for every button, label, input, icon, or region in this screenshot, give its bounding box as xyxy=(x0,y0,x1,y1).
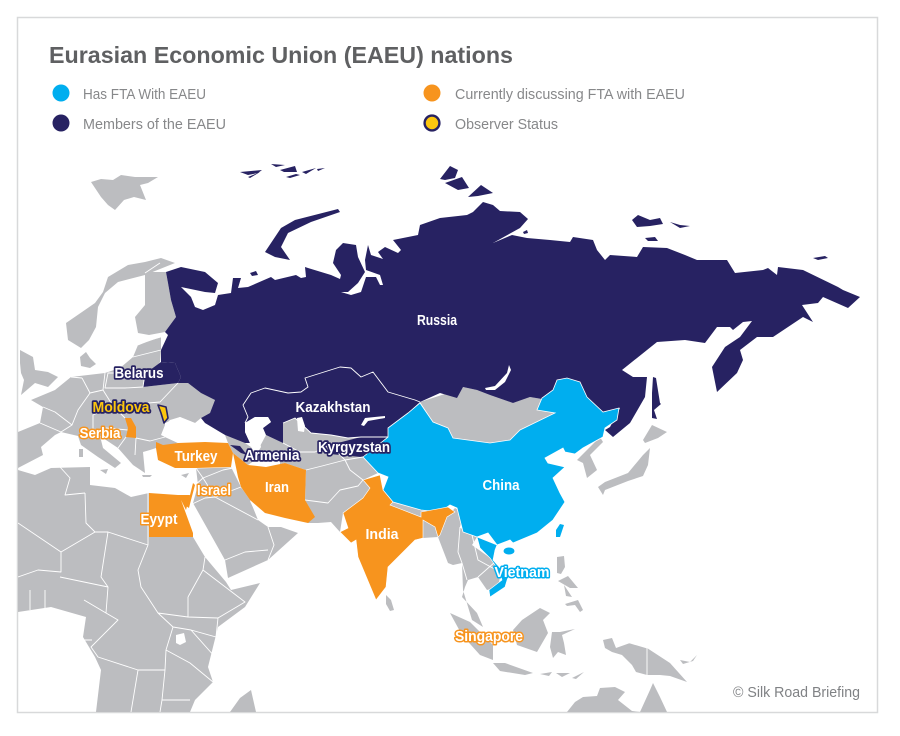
Svalbard xyxy=(91,175,158,210)
Caucasus xyxy=(225,435,254,465)
Lake Victoria xyxy=(176,633,186,645)
label: Israel: Israel xyxy=(197,483,231,499)
Japan xyxy=(598,425,667,495)
Belarus xyxy=(143,362,181,387)
Central and South Asia xyxy=(258,418,378,532)
Serbia xyxy=(125,418,136,438)
Sumatra xyxy=(450,613,493,660)
label: Armenia: Armenia xyxy=(244,448,300,464)
Red Sea xyxy=(181,502,227,580)
Franz Josef Land xyxy=(240,164,325,178)
label: Russia: Russia xyxy=(417,313,458,329)
Madagascar xyxy=(230,690,256,712)
Java and lesser islands xyxy=(493,663,584,679)
Novaya Zemlya xyxy=(265,209,340,260)
Borneo xyxy=(513,608,550,652)
Severnaya Zemlya xyxy=(440,166,493,197)
Black Sea xyxy=(165,417,228,443)
Vietnam xyxy=(477,537,508,597)
Sri Lanka xyxy=(386,595,394,611)
legend item: members: Members of the EAEU xyxy=(83,117,226,133)
country labels xyxy=(80,313,550,645)
label: Kazakhstan: Kazakhstan xyxy=(296,400,370,416)
Kazakhstan to China and Central Asia border xyxy=(283,418,388,438)
continental Europe xyxy=(18,337,215,473)
Mediterranean islands xyxy=(79,449,189,478)
Turkey surrounds, Caucasus and Middle East xyxy=(193,467,298,578)
Scandinavia xyxy=(66,258,175,348)
Central Asia borders xyxy=(283,443,363,503)
India xyxy=(340,475,455,600)
Middle East borders xyxy=(190,467,274,560)
legend xyxy=(52,84,685,133)
Kyrgyzstan xyxy=(330,437,388,457)
Caspian Sea xyxy=(245,417,280,469)
label: Serbia: Serbia xyxy=(80,426,121,442)
Australia xyxy=(567,683,667,712)
Lake Balkhash xyxy=(361,416,385,426)
country borders xyxy=(18,263,647,712)
Russia and Kazakhstan mainland xyxy=(161,202,860,443)
label: Eyypt: Eyypt xyxy=(140,512,178,528)
label: Singapore: Singapore xyxy=(455,629,523,645)
label: Turkey: Turkey xyxy=(174,449,218,465)
Lake Baikal xyxy=(485,365,511,390)
copyright credit: © Silk Road Briefing xyxy=(733,684,860,701)
Finland xyxy=(135,272,176,335)
Iran xyxy=(233,453,315,523)
label: Iran: Iran xyxy=(265,480,289,496)
title: Eurasian Economic Union (EAEU) nations xyxy=(49,42,513,68)
label: China: China xyxy=(482,478,520,494)
Bolshevik island xyxy=(523,230,528,234)
Kazakhstan border xyxy=(243,367,420,423)
white lakes and seas xyxy=(165,365,511,645)
Bougainville islands xyxy=(680,655,697,664)
Hainan xyxy=(504,548,514,554)
New Siberian Islands xyxy=(632,215,690,241)
label: Kyrgyzstan: Kyrgyzstan xyxy=(318,440,390,456)
Israel xyxy=(186,483,195,508)
dark land: Russia, Kazakhstan, Belarus xyxy=(143,164,860,457)
grey land masses xyxy=(18,175,697,712)
Southeast Asia mainland xyxy=(423,508,500,627)
Kolguev xyxy=(250,271,258,276)
Southeast Asia borders xyxy=(458,527,647,675)
Africa borders xyxy=(18,467,245,712)
Sakhalin xyxy=(652,377,661,419)
map xyxy=(18,164,860,712)
Europe borders xyxy=(40,263,178,455)
New Guinea xyxy=(603,638,687,682)
Moldova xyxy=(158,405,168,423)
Africa xyxy=(18,467,260,712)
Great Britain and Ireland xyxy=(20,350,58,395)
Persian Gulf xyxy=(250,501,285,524)
Armenia xyxy=(230,445,246,454)
Egypt xyxy=(149,493,193,537)
label: Vietnam: Vietnam xyxy=(494,565,550,581)
Mongolia xyxy=(420,387,555,443)
Korea xyxy=(577,437,603,478)
Nepal and Bhutan xyxy=(390,502,426,516)
Sulawesi xyxy=(550,629,575,658)
Taiwan xyxy=(556,524,564,537)
Wrangel Island xyxy=(813,256,828,260)
label: India: India xyxy=(366,527,399,543)
label: Moldova: Moldova xyxy=(92,400,150,416)
label: Belarus: Belarus xyxy=(114,366,164,382)
Turkey xyxy=(156,442,233,468)
legend item: discussing FTA: Currently discussing FTA with EAEU xyxy=(455,87,685,103)
legend item: has FTA xyxy=(52,84,206,103)
China xyxy=(363,378,619,545)
Philippines xyxy=(557,556,583,612)
legend item: observer: Observer Status xyxy=(455,117,558,133)
Aral Sea xyxy=(297,417,305,432)
Denmark xyxy=(80,352,96,368)
legend item: has FTA: Has FTA With EAEU xyxy=(83,87,206,103)
